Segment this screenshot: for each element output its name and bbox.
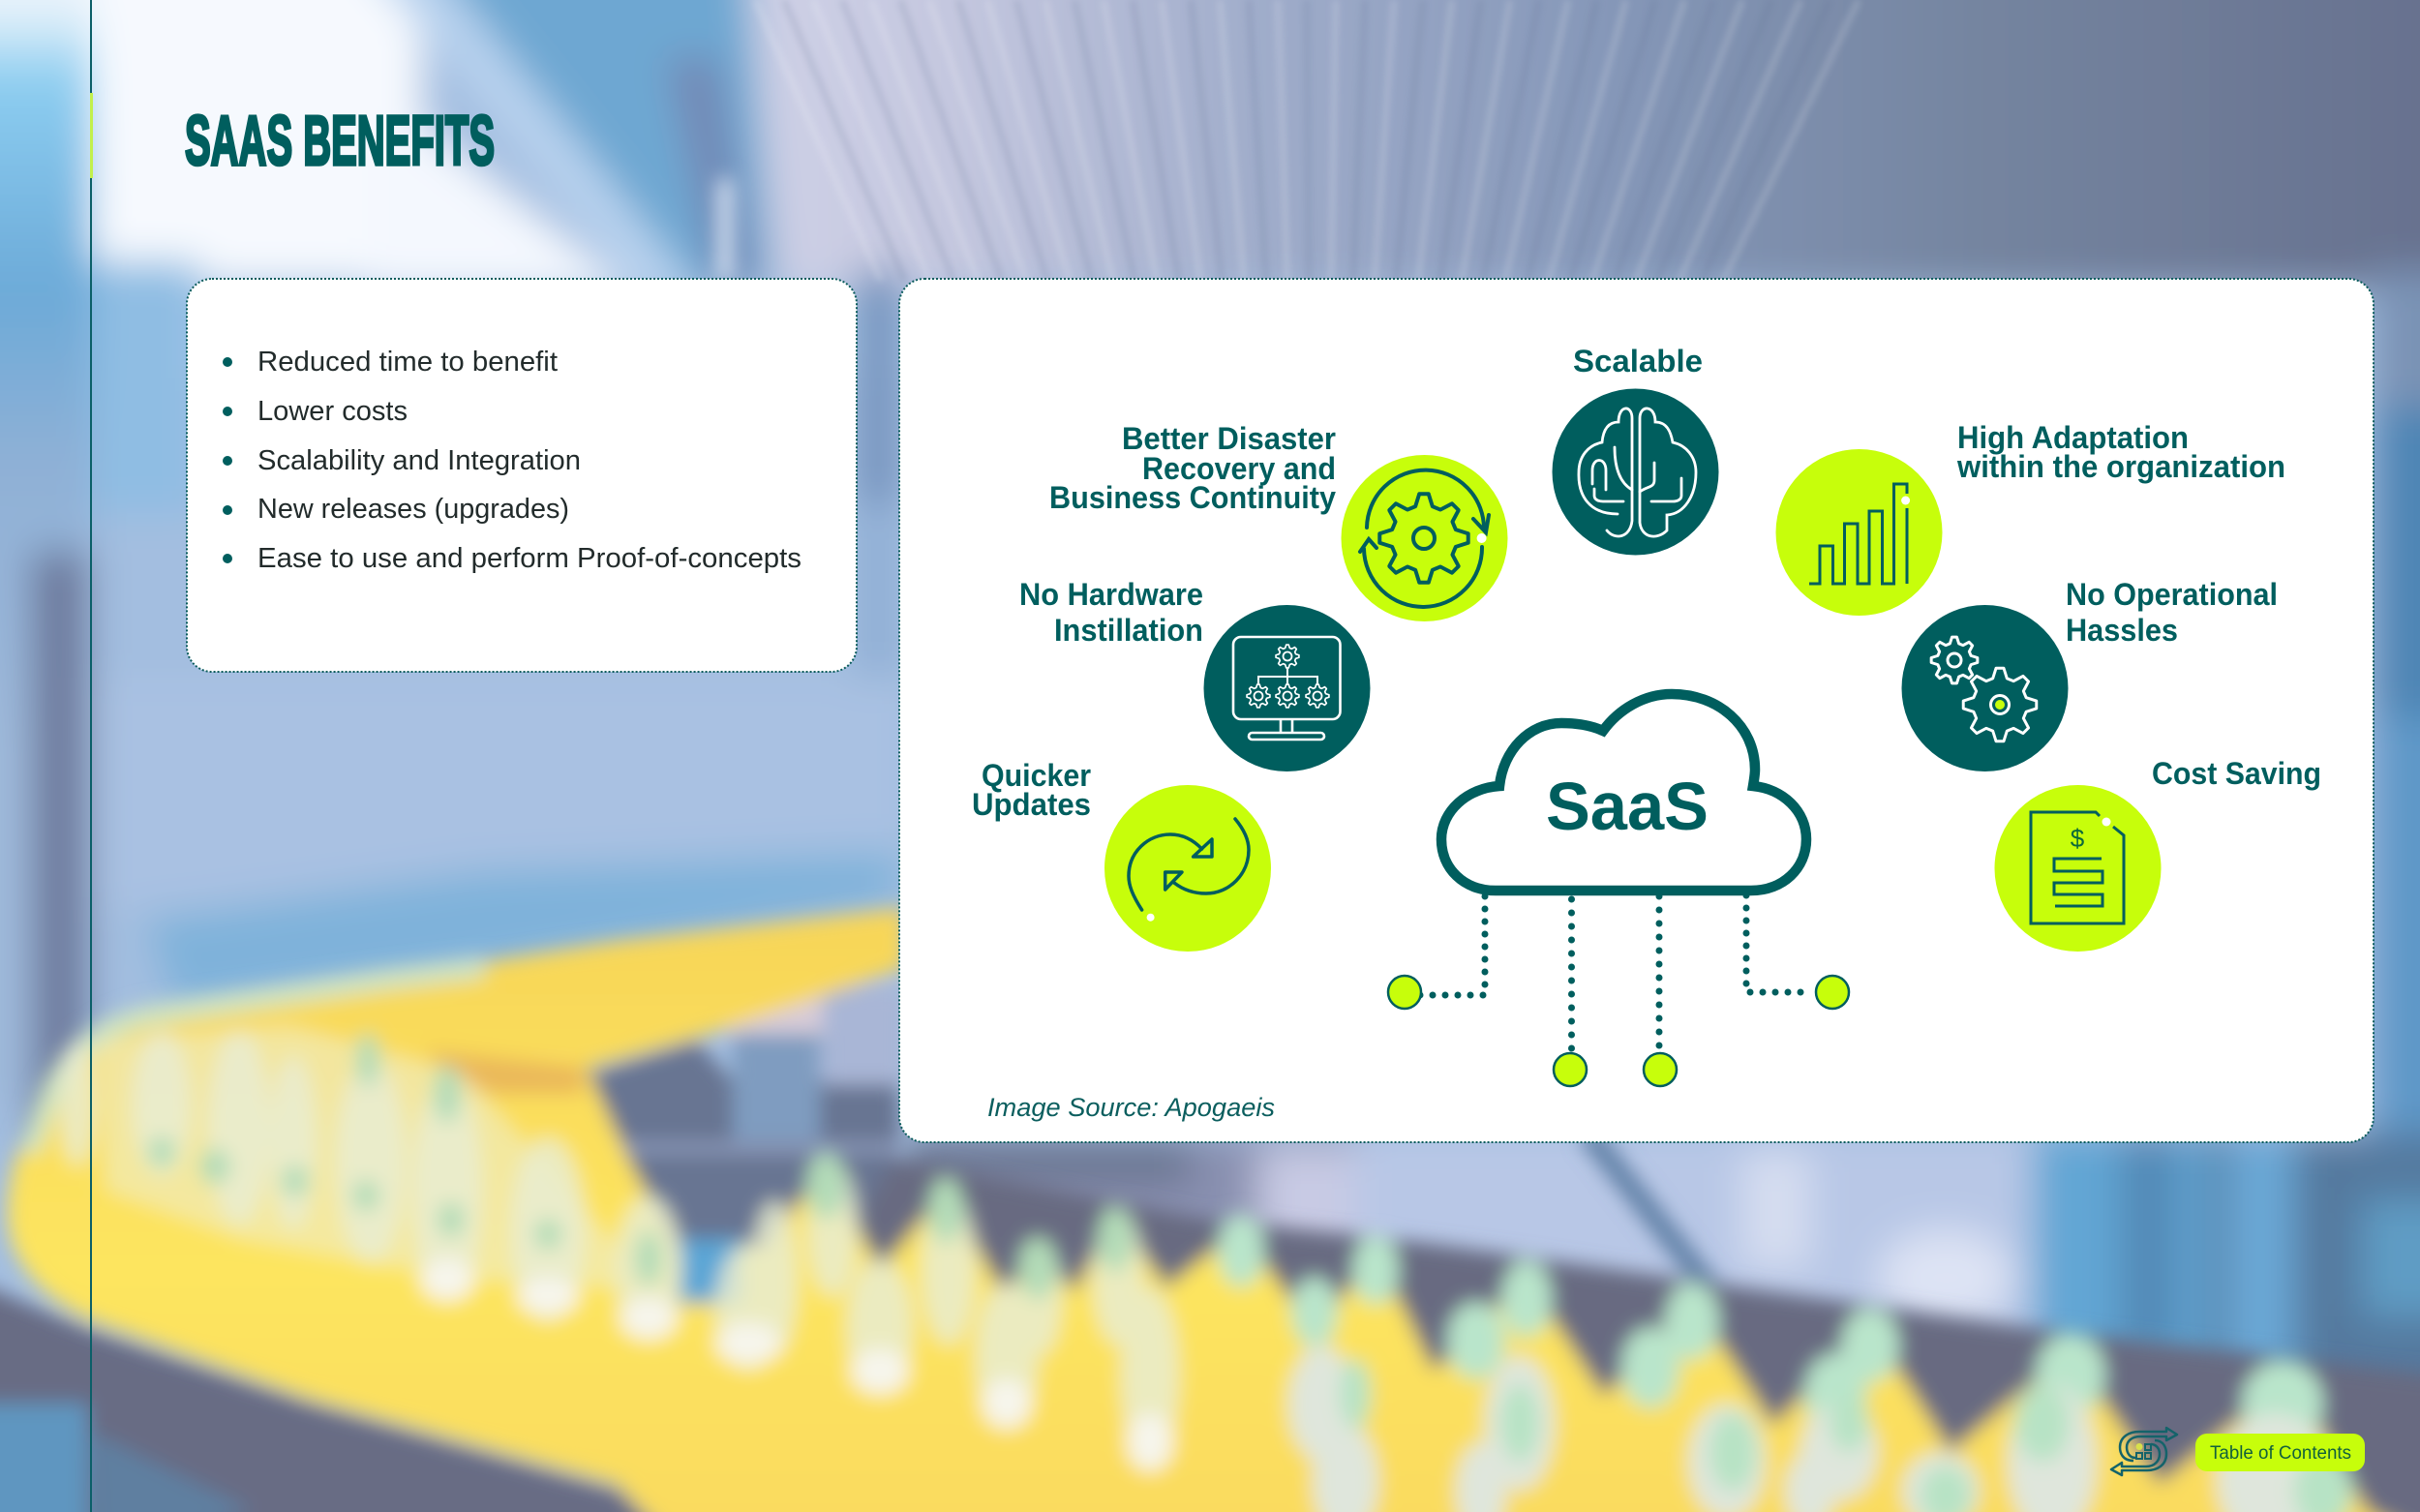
bullet: scalability: Scalability and Integration: [257, 445, 581, 476]
yellow conveyor: [8, 908, 2420, 1512]
label: no operational hassles: [2066, 577, 2278, 648]
bullet: proof of concepts: Ease to use and perform Proof-of-concepts: [257, 543, 802, 574]
dotted connectors: [1418, 895, 1810, 1050]
cloud with SaaS label: [1441, 694, 1806, 891]
icon: monitor with gears in teal circle: [1204, 605, 1371, 771]
label: no hardware: [1019, 577, 1203, 648]
label: disaster recovery: [1049, 421, 1336, 515]
dark lower-left rail: [0, 1268, 697, 1512]
label: quicker updates: [972, 758, 1091, 822]
icon: two gears in teal circle: [1901, 605, 2068, 771]
pale wash of bottles: [97, 1026, 620, 1287]
icon: invoice document in lime circle: [1994, 785, 2161, 952]
label: no operational hassles: No Operational: [2066, 577, 2278, 612]
lower band: [900, 1133, 1404, 1268]
connector nodes: [1388, 976, 1849, 1086]
button: table of contents: Table of Contents: [2210, 1442, 2351, 1464]
icon: bar chart in lime circle: [1775, 449, 1942, 616]
title: SAAS BENEFITS: [185, 103, 495, 180]
icon: invoice document in lime circle: $: [2071, 824, 2085, 853]
icon: gear with cycle arrows in lime circle: [1342, 455, 1508, 621]
fringe on bottles along top of belt: [29, 968, 484, 1152]
bullet: reduced time: Reduced time to benefit: [257, 347, 558, 378]
bottles on belt, left: [60, 1031, 1179, 1462]
panel: benefits list: [187, 279, 857, 672]
label: scalable: Scalable: [1573, 344, 1703, 378]
label: quicker updates: Updates: [972, 787, 1091, 822]
ceiling stripes: [755, 0, 1859, 281]
label: disaster recovery: Business Continuity: [1049, 480, 1336, 515]
bullet: new releases: New releases (upgrades): [257, 494, 569, 525]
bullet: lower costs: Lower costs: [257, 396, 408, 427]
label: disaster recovery: Recovery and: [1142, 451, 1336, 486]
label: high adaptation: [1956, 420, 2285, 484]
label: quicker updates: Quicker: [982, 758, 1091, 793]
label: disaster recovery: Better Disaster: [1122, 421, 1336, 456]
icon: table of contents swirl: [2111, 1428, 2177, 1475]
label: high adaptation: High Adaptation: [1957, 420, 2189, 455]
button: table of contents: [2195, 1434, 2365, 1471]
icon: refresh arrows in lime circle: [1104, 785, 1271, 952]
left rail line with lime accent: [90, 0, 93, 1512]
panel: SaaS diagram: [899, 279, 2374, 1142]
image source caption: Image Source: Apogaeis: [987, 1093, 1275, 1122]
cloud with SaaS label: SaaS: [1546, 769, 1709, 844]
label: cost saving: Cost Saving: [2152, 756, 2321, 791]
label: no operational hassles: Hassles: [2066, 613, 2178, 648]
label: high adaptation: within the organization: [1956, 449, 2285, 484]
label: no hardware: Instillation: [1054, 613, 1203, 648]
label: no hardware: No Hardware: [1019, 577, 1203, 612]
bottles on belt, right: [1218, 1214, 2323, 1446]
machine centre: [587, 1041, 899, 1268]
icon: brain in teal circle: [1553, 389, 1719, 556]
